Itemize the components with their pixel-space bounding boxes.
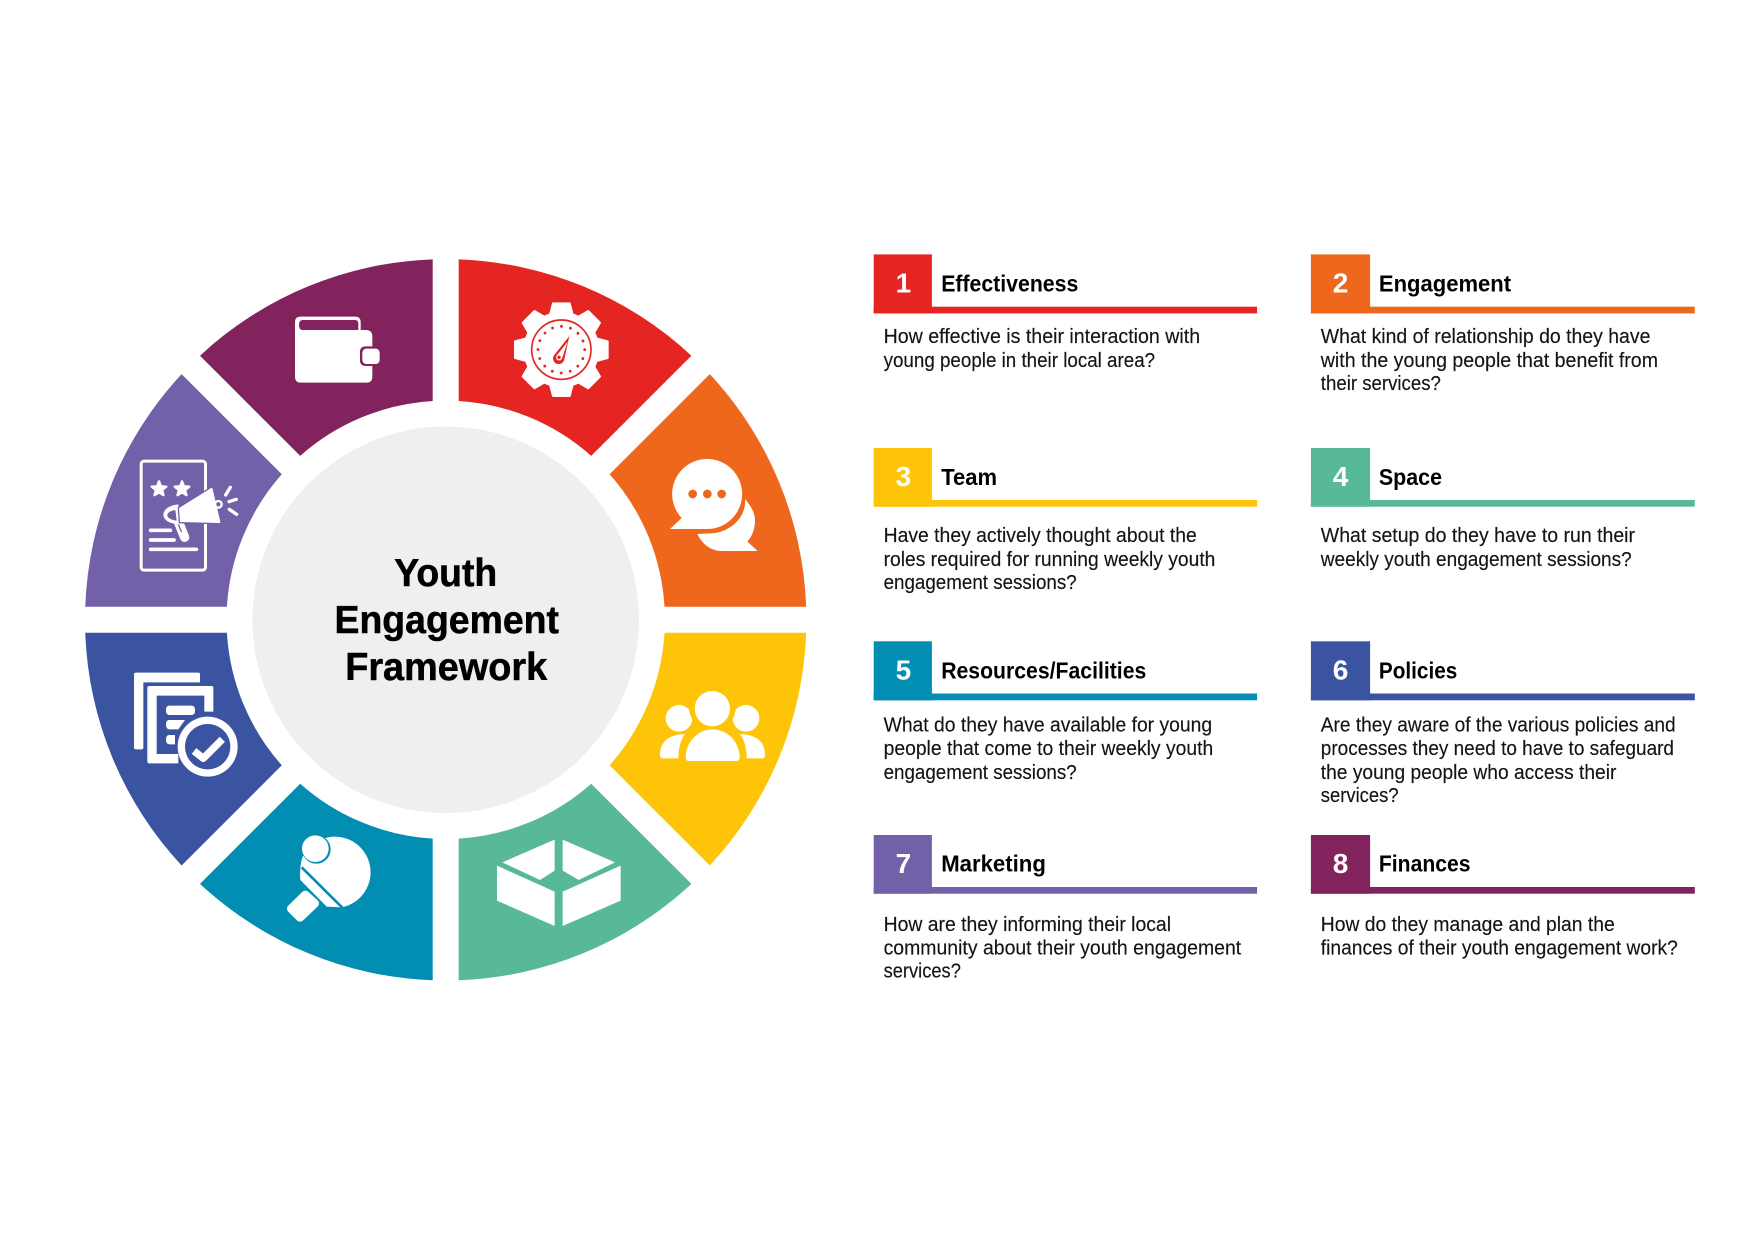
card 6: Policies [1311, 641, 1695, 807]
number badge and rule: 1 [896, 268, 911, 298]
card 4: Space [1311, 448, 1695, 571]
segment: resources (teal) [200, 784, 433, 980]
description [1320, 525, 1635, 571]
description: How effective is their interaction with [884, 326, 1200, 348]
number badge and rule [1311, 641, 1695, 700]
number badge and rule [1311, 254, 1695, 313]
number badge and rule [874, 835, 1257, 894]
number badge and rule [874, 641, 1257, 700]
description: weekly youth engagement sessions? [1320, 549, 1632, 571]
icon: table tennis paddle [291, 835, 371, 917]
segment: finances (wine) [200, 259, 433, 456]
icon: open box [497, 840, 621, 926]
description [1321, 715, 1676, 807]
description [884, 914, 1242, 983]
segment: team (yellow) [610, 633, 806, 866]
segment: effectiveness (red) [459, 259, 691, 456]
heading: Finances [1379, 851, 1470, 877]
description: roles required for running weekly youth [884, 549, 1215, 571]
card 8: Finances [1311, 835, 1695, 959]
description: What setup do they have to run their [1321, 525, 1635, 547]
description [1320, 326, 1658, 395]
description: Have they actively thought about the [884, 525, 1197, 547]
number badge and rule: 4 [1333, 461, 1349, 492]
number badge and rule [874, 448, 1257, 507]
number badge and rule: 6 [1333, 654, 1348, 686]
description [1321, 914, 1678, 959]
title: Youth Engagement Framework: Youth [394, 552, 497, 595]
segment: marketing (purple) [85, 374, 282, 607]
description [884, 525, 1215, 594]
number badge and rule [874, 254, 1257, 313]
icon: speech bubbles [670, 459, 758, 551]
number badge and rule: 3 [896, 461, 911, 492]
number badge and rule: 5 [896, 654, 911, 686]
description: services? [884, 961, 961, 983]
title: Youth Engagement Framework: Engagement [334, 599, 559, 642]
description: their services? [1321, 373, 1441, 395]
description: with the young people that benefit from [1320, 350, 1658, 372]
title: Youth Engagement Framework: Framework [345, 646, 547, 689]
heading: Team [941, 464, 997, 490]
card 2: Engagement [1311, 254, 1695, 395]
segment: engagement (orange) [610, 374, 806, 607]
heading: Policies [1379, 658, 1457, 684]
card 7: Marketing [874, 835, 1257, 983]
description [884, 715, 1213, 784]
icon: group of people [660, 684, 765, 761]
card 3: Team [874, 448, 1257, 594]
title: Youth Engagement Framework [334, 552, 559, 689]
description: What kind of relationship do they have [1321, 326, 1650, 348]
icon: wallet [295, 317, 381, 383]
description: What do they have available for young [884, 715, 1212, 737]
heading: Effectiveness [941, 270, 1078, 296]
heading: Engagement [1379, 270, 1511, 296]
description: finances of their youth engagement work? [1321, 937, 1678, 959]
description: services? [1321, 785, 1399, 807]
number badge and rule: 2 [1333, 268, 1348, 298]
panel: framework wheel [85, 259, 806, 980]
heading: Resources/Facilities [941, 658, 1146, 684]
number badge and rule: 8 [1333, 848, 1348, 879]
description: processes they need to have to safeguard [1321, 738, 1674, 760]
description: young people in their local area? [884, 350, 1155, 372]
description: How are they informing their local [884, 914, 1171, 936]
description: engagement sessions? [884, 762, 1077, 784]
number badge and rule [1311, 448, 1695, 507]
description: engagement sessions? [884, 572, 1077, 594]
heading: Marketing [941, 851, 1046, 877]
description: community about their youth engagement [884, 937, 1242, 959]
icon: documents with check mark [134, 673, 238, 777]
heading: Space [1379, 464, 1442, 490]
description: people that come to their weekly youth [884, 738, 1213, 760]
description: How do they manage and plan the [1321, 914, 1615, 936]
description [884, 326, 1200, 372]
description: Are they aware of the various policies and [1321, 715, 1676, 737]
card 1: Effectiveness [874, 254, 1257, 372]
icon: gear with gauge [515, 303, 608, 396]
icon: marketing phone with megaphone [141, 461, 237, 570]
card 5: Resources/Facilities [874, 641, 1257, 784]
centre circle [252, 426, 639, 813]
number badge and rule: 7 [896, 848, 911, 879]
segment: policies (blue) [85, 633, 282, 866]
description: the young people who access their [1321, 762, 1617, 784]
segment: space (green) [459, 784, 691, 980]
number badge and rule [1311, 835, 1695, 894]
